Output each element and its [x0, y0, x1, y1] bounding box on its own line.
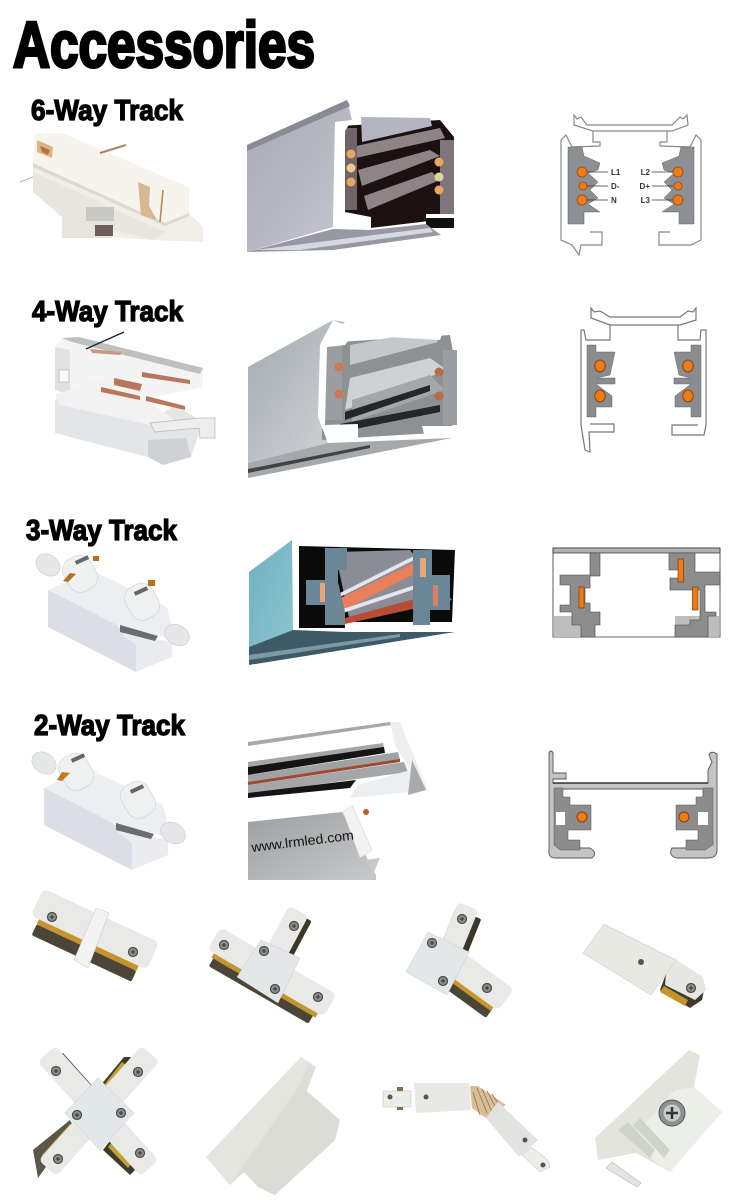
- diagram: 2-way cross-section: [549, 751, 717, 858]
- panel: 2-way track: [28, 710, 717, 880]
- labels: conductors: D-: [611, 182, 620, 191]
- icon: X connector: [33, 1046, 159, 1178]
- heading: 6-way track: 6-Way Track: [31, 95, 184, 127]
- photo: 3-way adapter: [32, 549, 193, 672]
- heading: 4-way track: 4-Way Track: [32, 296, 184, 328]
- panel: connectors row 2: [33, 1046, 722, 1195]
- photo: 2-way track section: [248, 722, 428, 880]
- icon: T connector: [207, 906, 337, 1024]
- labels: conductors: L2: [641, 168, 651, 177]
- heading: 2-way track: 2-Way Track: [34, 710, 186, 742]
- panel: connectors row 1: [31, 888, 706, 1024]
- labels: conductors: L3: [641, 196, 651, 205]
- photo: 6-way track section: [247, 100, 454, 252]
- photo: 4-way adapter: [55, 332, 215, 465]
- panel: 6-way track: [20, 95, 701, 255]
- icon: L connector: [406, 902, 514, 1018]
- icon: flexible connector: [383, 1083, 550, 1172]
- icon: end feed connector: [595, 1050, 722, 1187]
- diagram: 6-way cross-section: [561, 115, 701, 255]
- title: Accessories: [13, 8, 315, 81]
- photo: 4-way track section: [248, 320, 458, 478]
- panel: 4-way track: [32, 296, 706, 478]
- labels: conductors: N: [611, 196, 617, 205]
- photo: 6-way adapter: [20, 133, 203, 242]
- icon: screw: [659, 1100, 685, 1126]
- labels: conductors: L1: [611, 168, 621, 177]
- icon: live-end connector: [583, 924, 706, 1008]
- photo: 3-way track section: [249, 538, 462, 665]
- labels: conductors: [611, 168, 651, 205]
- heading: 3-way track: 3-Way Track: [26, 515, 178, 547]
- labels: conductors: D+: [640, 182, 650, 191]
- icon: straight connector: [31, 888, 159, 982]
- icon: end cap: [206, 1057, 340, 1195]
- watermark url: www.lrmled.com: [249, 828, 355, 855]
- photo: 2-way adapter: [28, 747, 189, 870]
- diagram: 3-way cross-section: [553, 548, 720, 637]
- panel: 3-way track: [26, 515, 720, 672]
- diagram: 4-way cross-section: [581, 308, 706, 452]
